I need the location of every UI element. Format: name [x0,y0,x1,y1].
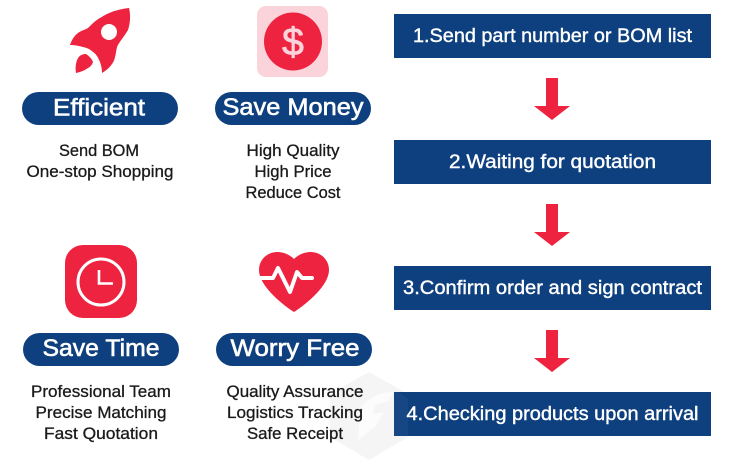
step 3: 3.Confirm order and sign contract [403,277,703,299]
text: worry free details [226,382,364,443]
text: worry free details: Quality Assurance [226,382,364,401]
text: efficient details [26,141,174,181]
pill: Save Money: Save Money [222,94,364,121]
arrow: step 3 to 4 [534,330,570,372]
pill: Efficient [22,92,178,125]
step 3 [394,266,711,310]
text: efficient details: Send BOM [59,141,139,160]
panel: save time [23,245,179,443]
text: save time details: Precise Matching [36,403,166,422]
panel: worry free [216,252,372,443]
text: worry free details: Safe Receipt [247,424,343,443]
arrow: step 2 to 3 [534,204,570,246]
watermark [330,372,408,460]
pill: Efficient: Efficient [53,94,145,122]
text: save money details [246,141,341,202]
step 2: 2.Waiting for quotation [449,151,656,173]
text: save money details: High Price [254,162,332,181]
step 4 [394,392,711,436]
pill: Worry Free: Worry Free [230,335,360,362]
icon: dollar coin: $ [282,21,304,64]
step 4: 4.Checking products upon arrival [406,403,698,425]
pill: Save Time: Save Time [42,335,160,362]
pill: Worry Free [216,333,372,366]
pill: Save Money [215,92,371,125]
step 2 [394,140,711,184]
text: save time details: Fast Quotation [44,424,158,443]
text: save time details [31,382,171,443]
text: save money details: High Quality [246,141,340,160]
icon: clock [65,245,137,318]
text: save time details: Professional Team [31,382,171,401]
text: worry free details: Logistics Tracking [227,403,363,422]
icon: rocket [70,8,130,73]
step 1 [394,14,711,58]
icon: dollar coin [257,6,328,77]
arrow: step 1 to 2 [534,78,570,120]
text: efficient details: One-stop Shopping [26,162,174,181]
step 1: 1.Send part number or BOM list [413,25,693,47]
panel: save money [215,6,371,202]
text: save money details: Reduce Cost [246,183,341,202]
pill: Save Time [23,333,179,366]
panel: efficient [22,8,178,181]
icon: heart with pulse [259,252,329,312]
